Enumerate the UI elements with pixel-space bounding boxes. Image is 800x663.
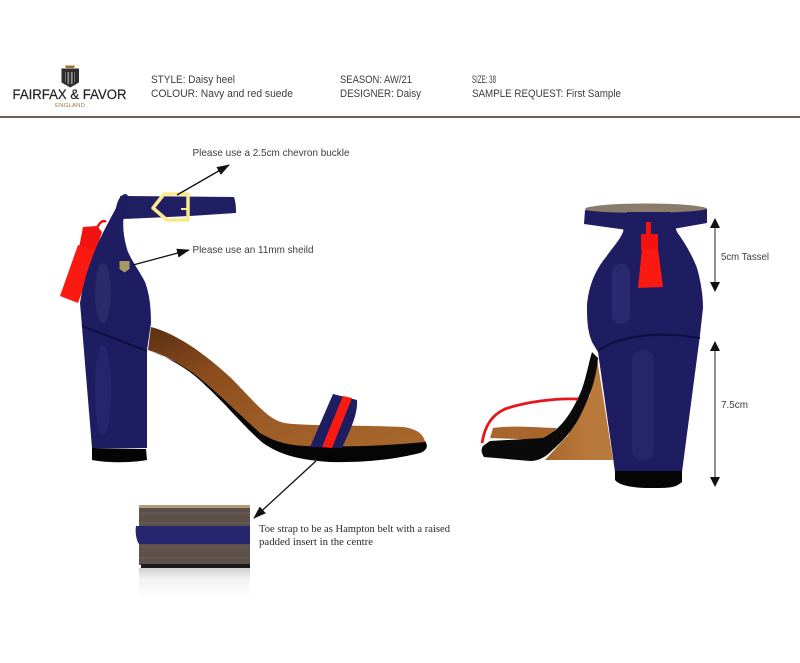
size and sample request: SIZE: 38 bbox=[472, 74, 496, 86]
heel tip bbox=[92, 448, 147, 462]
logo: Fairfax & Favor: ENGLAND bbox=[55, 103, 85, 109]
insole bbox=[148, 327, 425, 446]
upper and heel bbox=[80, 194, 151, 448]
season and designer: SEASON: AW/21 bbox=[340, 74, 412, 86]
callout: shield: Please use an 11mm sheild bbox=[192, 244, 314, 256]
Hampton belt swatch bbox=[136, 505, 250, 597]
callout: toe strap: Toe strap to be as Hampton belt with a raised bbox=[259, 524, 451, 535]
callout: toe strap: padded insert in the centre bbox=[259, 537, 373, 548]
toe strap bbox=[310, 394, 357, 448]
style details bbox=[151, 74, 293, 100]
heel seam bbox=[598, 335, 700, 351]
heel seam bbox=[82, 326, 147, 351]
style details: COLOUR: Navy and red suede bbox=[151, 88, 293, 100]
callout: toe strap bbox=[254, 461, 451, 548]
tassel bbox=[638, 222, 663, 288]
ankle strap bbox=[120, 196, 236, 219]
callout: chevron buckle: Please use a 2.5cm chevron buckle bbox=[192, 147, 350, 159]
insole bbox=[490, 427, 557, 440]
rear view sandal bbox=[482, 204, 707, 488]
icon: shield bbox=[120, 261, 130, 272]
black sole and strap bbox=[482, 352, 598, 461]
dimension: 7.5cm heel: 7.5cm bbox=[721, 399, 748, 411]
style details: STYLE: Daisy heel bbox=[151, 74, 235, 86]
heel tip bbox=[615, 471, 682, 488]
season and designer bbox=[340, 74, 421, 100]
wood heel bbox=[545, 358, 613, 460]
logo: Fairfax & Favor bbox=[12, 66, 127, 109]
logo: Fairfax & Favor: FAIRFAX & FAVOR bbox=[12, 87, 127, 102]
sole bbox=[148, 350, 427, 462]
highlights bbox=[612, 264, 630, 324]
dimension: 7.5cm heel bbox=[710, 341, 748, 487]
size and sample request: SAMPLE REQUEST: First Sample bbox=[472, 88, 621, 100]
back ankle strap bbox=[584, 209, 707, 230]
red toe strap bbox=[482, 399, 578, 443]
upper and heel bbox=[587, 212, 703, 472]
header band bbox=[12, 66, 621, 109]
tassel bbox=[60, 221, 106, 303]
header divider bbox=[0, 116, 800, 118]
season and designer: DESIGNER: Daisy bbox=[340, 88, 421, 100]
dimension: 5cm tassel: 5cm Tassel bbox=[721, 251, 769, 263]
size and sample request bbox=[472, 74, 621, 100]
heel highlight bbox=[95, 263, 111, 323]
chevron buckle bbox=[153, 194, 189, 220]
icon: crest bbox=[62, 66, 79, 88]
dimension: 5cm tassel bbox=[710, 218, 769, 292]
callout: shield bbox=[133, 244, 314, 265]
callout: chevron buckle bbox=[177, 147, 350, 195]
strap interior bbox=[585, 204, 707, 214]
side view sandal bbox=[60, 194, 427, 462]
